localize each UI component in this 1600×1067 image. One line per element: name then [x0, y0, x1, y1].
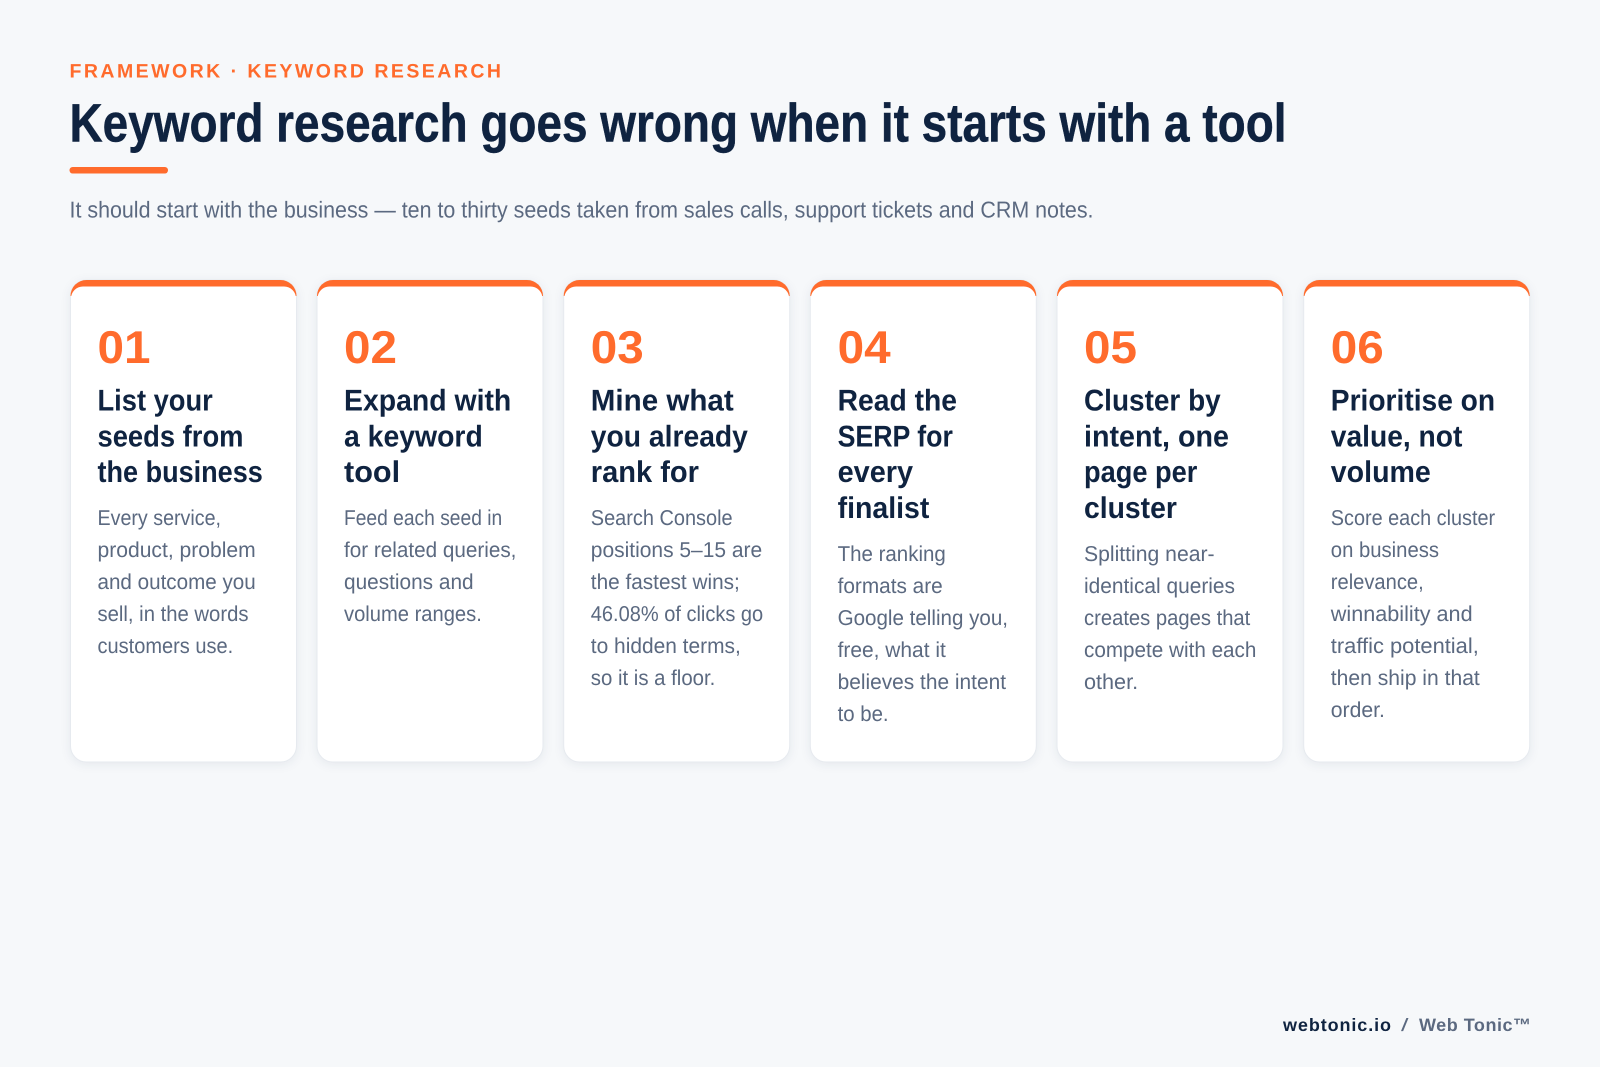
- body 06: order.: [1331, 698, 1385, 722]
- body 06: [1330, 506, 1495, 722]
- body 04: believes the intent: [838, 670, 1006, 694]
- heading 05: page per: [1084, 456, 1198, 489]
- heading 04: every: [838, 456, 913, 489]
- heading 01: [98, 385, 263, 489]
- body 03: Search Console: [591, 506, 733, 530]
- subtitle: It should start with the business — ten to thirty seeds taken from sales calls, support tickets and CRM notes.: [70, 196, 1094, 222]
- title underline: [70, 167, 168, 174]
- heading 06: Prioritise on: [1331, 385, 1495, 418]
- card 03: [564, 280, 790, 762]
- body 01: product, problem: [98, 538, 256, 562]
- body 05: other.: [1084, 670, 1138, 694]
- body 05: identical queries: [1084, 574, 1235, 598]
- body 01: Every service,: [98, 506, 221, 530]
- body 03: [591, 506, 763, 690]
- footer brand: webtonic.io: [1282, 1015, 1391, 1035]
- body 06: relevance,: [1331, 570, 1424, 594]
- body 03: to hidden terms,: [591, 634, 741, 658]
- body 04: Google telling you,: [838, 606, 1008, 630]
- body 04: to be.: [838, 702, 889, 726]
- step number 04: 04: [838, 321, 891, 373]
- card 02: [317, 280, 543, 762]
- heading 04: Read the: [838, 385, 957, 418]
- heading 03: [591, 385, 748, 489]
- body 06: winnability and: [1330, 602, 1473, 626]
- card 01: [70, 280, 296, 762]
- card 05: [1057, 280, 1283, 762]
- body 01: customers use.: [98, 634, 233, 658]
- body 02: volume ranges.: [344, 602, 482, 626]
- body 03: positions 5–15 are: [591, 538, 762, 562]
- body 02: Feed each seed in: [344, 506, 502, 530]
- step number 05: 05: [1084, 321, 1137, 373]
- footer brand: Web Tonic™: [1419, 1015, 1531, 1035]
- body 05: compete with each: [1084, 638, 1256, 662]
- eyebrow: FRAMEWORK · KEYWORD RESEARCH: [70, 60, 501, 82]
- body 01: sell, in the words: [98, 602, 248, 626]
- heading 06: value, not: [1331, 420, 1462, 453]
- title: Keyword research goes wrong when it starts with a tool: [70, 94, 1286, 154]
- body 04: [838, 542, 1008, 726]
- heading 05: Cluster by: [1084, 385, 1221, 418]
- heading 01: the business: [98, 456, 263, 489]
- heading 05: intent, one: [1084, 420, 1229, 453]
- body 06: Score each cluster: [1331, 506, 1495, 530]
- step number 01: 01: [98, 321, 150, 373]
- body 05: Splitting near-: [1084, 542, 1215, 566]
- heading 04: finalist: [838, 492, 929, 525]
- heading 02: Expand with: [344, 385, 511, 418]
- step number 02: 02: [344, 321, 397, 373]
- step number 06: 06: [1331, 321, 1384, 373]
- footer brand: [1282, 1015, 1531, 1035]
- step number 03: 03: [591, 321, 644, 373]
- heading 04: [838, 385, 957, 525]
- heading 03: you already: [591, 420, 748, 453]
- body 02: [344, 506, 516, 626]
- body 05: creates pages that: [1084, 606, 1250, 630]
- body 06: on business: [1331, 538, 1439, 562]
- body 04: formats are: [838, 574, 943, 598]
- body 05: [1084, 542, 1256, 694]
- heading 02: a keyword: [344, 420, 483, 453]
- body 04: The ranking: [838, 542, 946, 566]
- heading 06: volume: [1331, 456, 1431, 489]
- body 01: [98, 506, 256, 658]
- footer brand: /: [1401, 1015, 1408, 1035]
- body 03: the fastest wins;: [591, 570, 740, 594]
- heading 06: [1331, 385, 1495, 489]
- heading 02: tool: [344, 456, 400, 489]
- heading 02: [344, 385, 511, 489]
- body 01: and outcome you: [98, 570, 256, 594]
- heading 03: rank for: [591, 456, 699, 489]
- heading 05: cluster: [1084, 492, 1177, 525]
- body 06: traffic potential,: [1331, 634, 1479, 658]
- body 03: 46.08% of clicks go: [591, 602, 763, 626]
- heading 01: seeds from: [98, 420, 244, 453]
- heading 01: List your: [98, 385, 213, 418]
- card 06: [1304, 280, 1530, 762]
- body 02: for related queries,: [344, 538, 516, 562]
- card 04: [810, 280, 1036, 762]
- body 04: free, what it: [838, 638, 946, 662]
- heading 05: [1084, 385, 1229, 525]
- heading 03: Mine what: [591, 385, 734, 418]
- body 06: then ship in that: [1331, 666, 1480, 690]
- body 02: questions and: [344, 570, 474, 594]
- body 03: so it is a floor.: [591, 666, 715, 690]
- heading 04: SERP for: [838, 420, 953, 453]
